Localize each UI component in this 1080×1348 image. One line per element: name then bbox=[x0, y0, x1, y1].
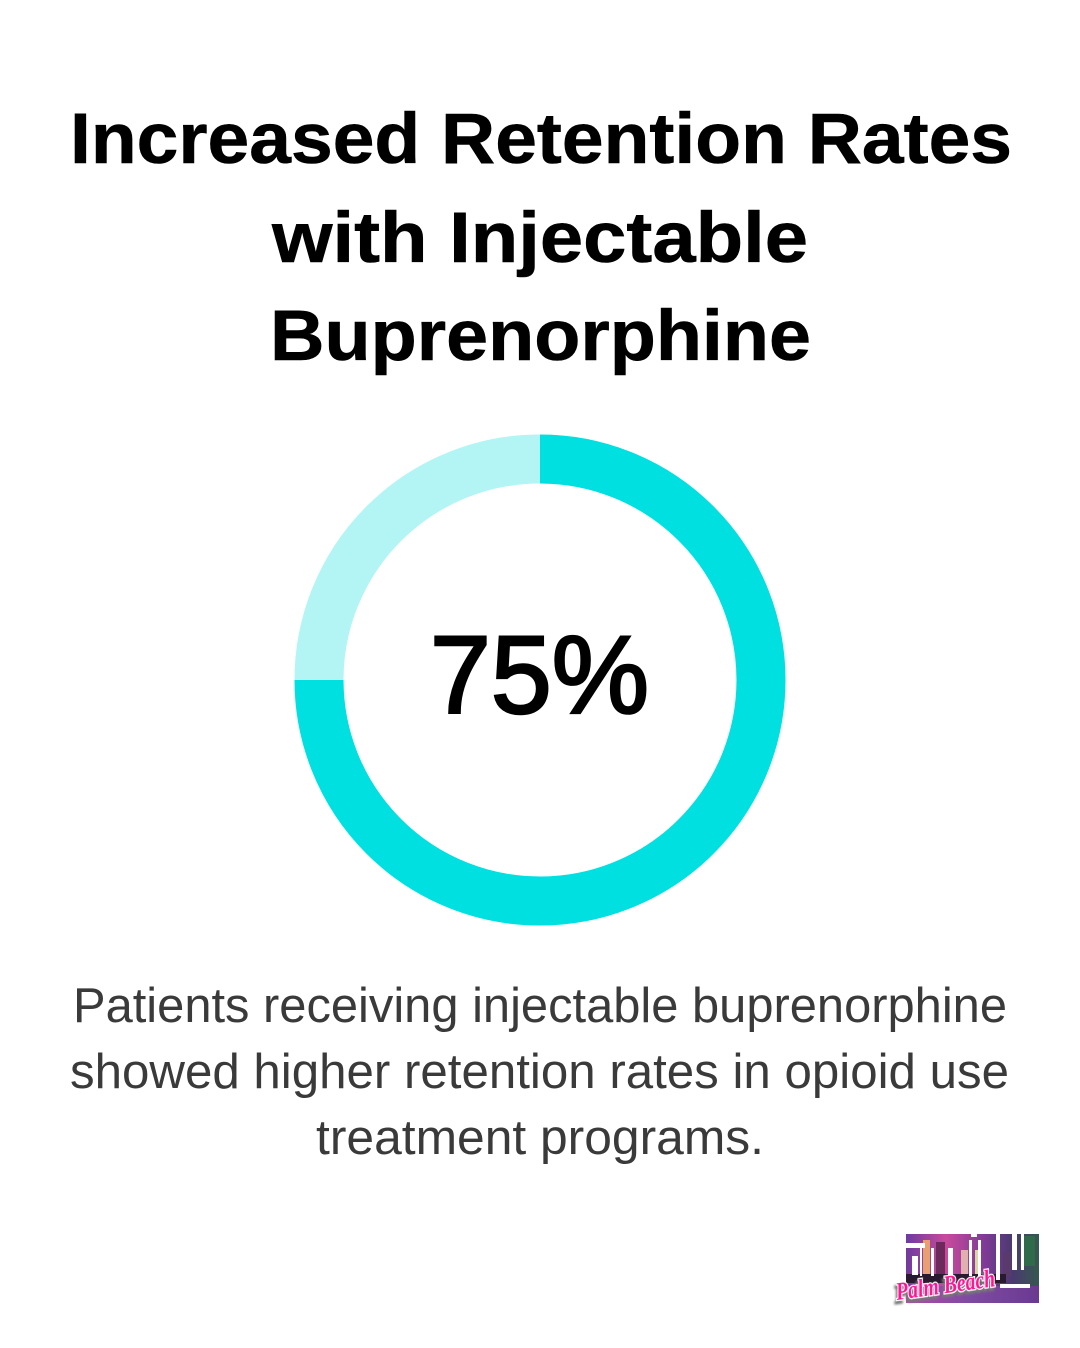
logo city image bbox=[906, 1234, 1039, 1286]
title: Increased Retention Rates bbox=[70, 100, 1012, 179]
logo: Amity Palm Beach bbox=[893, 1229, 1039, 1306]
description text: Patients receiving injectable buprenorphine bbox=[73, 979, 1007, 1033]
logo white letter gaps bbox=[906, 1229, 1030, 1288]
remaining track bbox=[319, 459, 761, 901]
title: with Injectable bbox=[271, 199, 808, 278]
description text: showed higher retention rates in opioid use bbox=[70, 1045, 1009, 1099]
donut chart: 75% bbox=[319, 459, 761, 901]
value label: 75% bbox=[430, 614, 649, 737]
title bbox=[70, 100, 1012, 376]
logo neon script: Palm Beach bbox=[893, 1265, 997, 1306]
description text: treatment programs. bbox=[316, 1111, 764, 1165]
description text bbox=[70, 979, 1009, 1165]
75% arc bbox=[319, 459, 761, 901]
title: Buprenorphine bbox=[270, 297, 811, 376]
